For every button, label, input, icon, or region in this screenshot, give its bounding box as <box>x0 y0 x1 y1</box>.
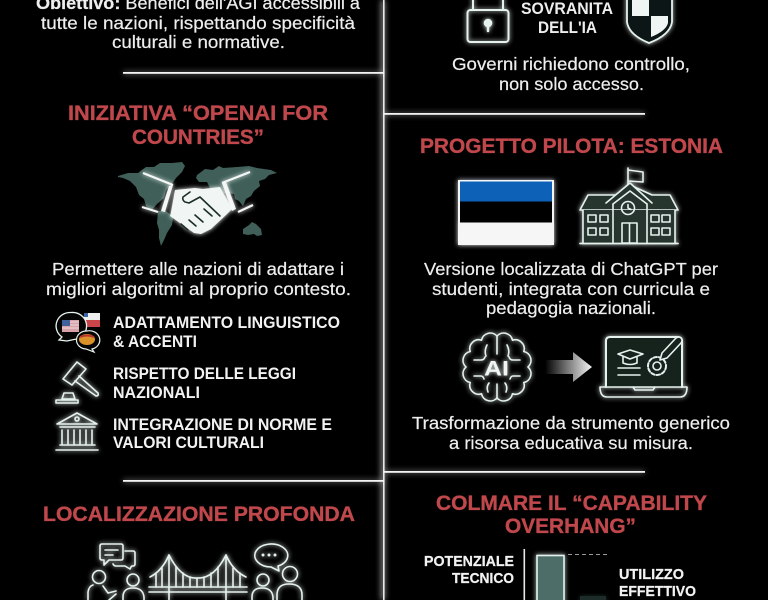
icon: estonian flag <box>458 180 554 245</box>
text block: versione localizzata <box>424 259 718 318</box>
text block: permettere alle nazioni <box>46 259 351 299</box>
text block: permettere alle nazioni: migliori algoritmi al proprio contesto. <box>46 279 351 299</box>
text block: obiettivo: culturali e normative. <box>112 32 285 52</box>
icon: brain with AI: AI <box>484 358 509 380</box>
chart: capability overhang <box>424 549 696 600</box>
label: potenziale tecnico: TECNICO <box>452 570 514 587</box>
icon: speech bubbles with flags <box>56 312 100 352</box>
text block: trasformazione <box>412 413 730 453</box>
icon: world map with handshake <box>118 162 277 246</box>
text block: versione localizzata: Versione localizzata di ChatGPT per <box>424 259 718 279</box>
label <box>521 0 613 37</box>
label: INTEGRAZIONE DI NORME E <box>113 416 332 434</box>
label: utilizzo effettivo <box>619 566 696 600</box>
icon: people, speech bubbles and bridge <box>88 544 302 600</box>
text block: obiettivo <box>36 0 360 52</box>
icon: classical building <box>56 413 98 450</box>
heading: colmare il capability overhang <box>436 492 707 538</box>
icon: school building <box>580 168 678 244</box>
central and section dividers <box>123 0 645 600</box>
label: NAZIONALI <box>113 384 200 402</box>
heading: iniziativa openai for countries: COUNTRIES” <box>132 126 264 149</box>
label <box>113 365 296 402</box>
text block: versione localizzata: pedagogia nazionali. <box>486 298 656 318</box>
list: integrazione di norme <box>56 413 332 452</box>
label: SOVRANITA <box>521 0 613 18</box>
text block: versione localizzata: studenti, integrata con curricula e <box>432 279 710 299</box>
label: utilizzo effettivo: UTILIZZO <box>619 566 684 583</box>
text block: trasformazione: Trasformazione da strumento generico <box>412 413 730 433</box>
arrow: from brain to laptop <box>545 352 592 382</box>
label <box>113 416 332 452</box>
icon: shield <box>627 0 672 43</box>
label: VALORI CULTURALI <box>113 434 264 452</box>
label: utilizzo effettivo: EFFETTIVO <box>619 583 696 600</box>
dashed level <box>568 554 608 556</box>
icon: padlock <box>468 0 508 42</box>
text block: trasformazione: a risorsa educativa su misura. <box>449 433 693 453</box>
label: DELL'IA <box>538 19 597 37</box>
heading: progetto pilota estonia: PROGETTO PILOTA: ESTONIA <box>420 135 723 158</box>
label: & ACCENTI <box>113 333 197 351</box>
icon: laptop with graduation cap and gear <box>600 337 687 397</box>
text block: obiettivo: tutte le nazioni, rispettando specificità <box>41 13 355 33</box>
heading: iniziativa openai for countries: INIZIATIVA “OPENAI FOR <box>68 102 328 125</box>
text block: governi richiedono controllo: non solo accesso. <box>499 74 644 94</box>
panel: sovranita dell'ia <box>468 0 672 43</box>
bar: potenziale <box>537 556 564 600</box>
heading: iniziativa openai for countries <box>68 102 328 149</box>
label: ADATTAMENTO LINGUISTICO <box>113 314 340 332</box>
icon: gavel <box>56 362 98 403</box>
label <box>113 314 340 351</box>
heading: colmare il capability overhang: OVERHANG” <box>505 515 636 538</box>
label: potenziale tecnico <box>424 553 514 587</box>
text block: governi richiedono controllo: Governi richiedono controllo, <box>452 54 690 74</box>
text block: governi richiedono controllo <box>452 54 690 94</box>
label: potenziale tecnico: POTENZIALE <box>424 553 514 570</box>
axis <box>524 549 525 600</box>
text block: permettere alle nazioni: Permettere alle nazioni di adattare i <box>52 259 344 279</box>
bar: utilizzo <box>580 596 606 600</box>
icon: brain with AI <box>463 333 531 401</box>
label: RISPETTO DELLE LEGGI <box>113 365 296 383</box>
list: rispetto delle leggi <box>56 362 296 403</box>
list: adattamento linguistico <box>56 312 340 352</box>
heading: localizzazione profonda: LOCALIZZAZIONE PROFONDA <box>43 503 355 526</box>
heading: colmare il capability overhang: COLMARE IL “CAPABILITY <box>436 492 707 515</box>
